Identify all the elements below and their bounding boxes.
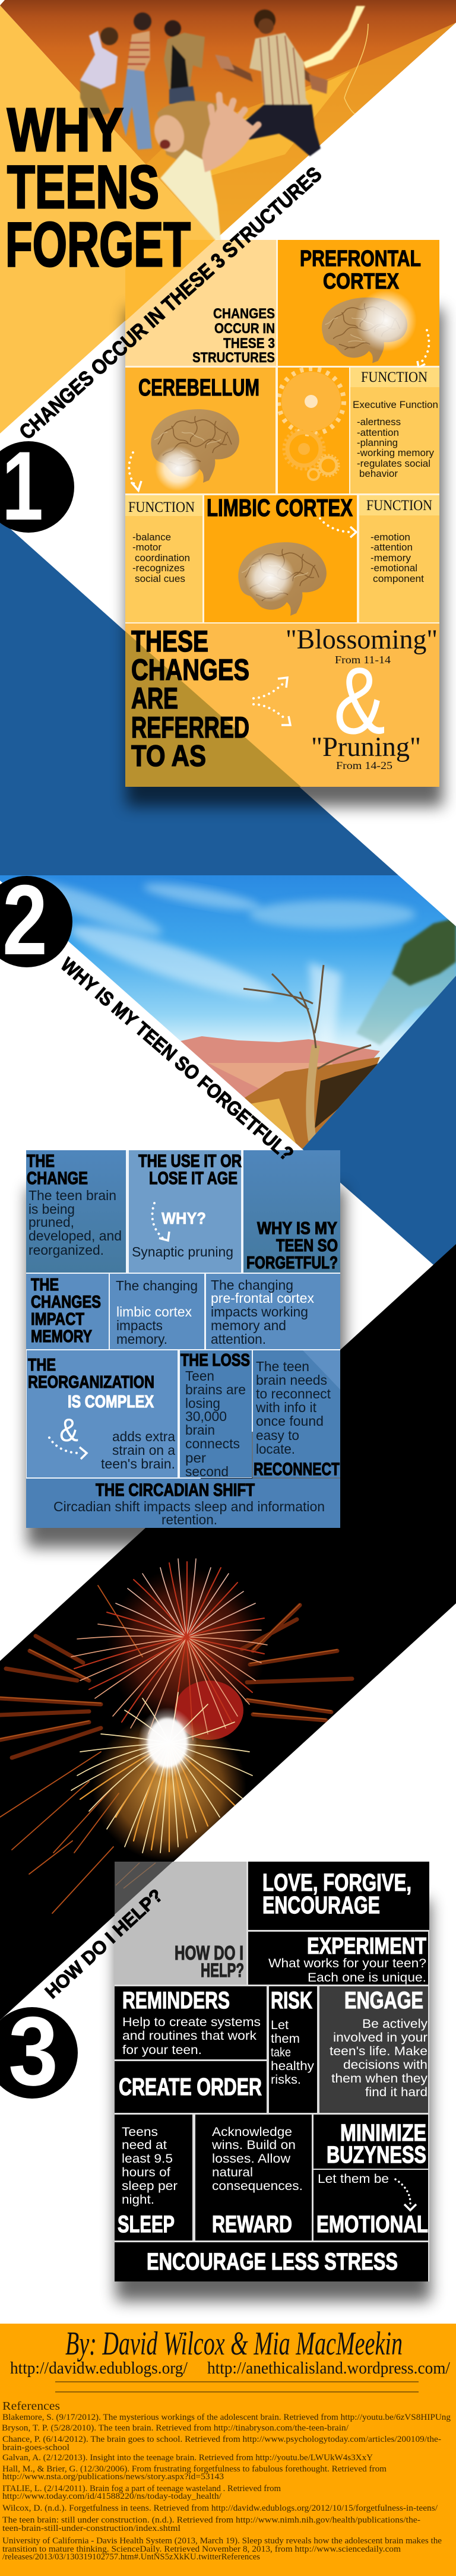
cell: the circadian shift: retention.	[162, 1512, 217, 1527]
person: striped shirt and jeans	[121, 12, 152, 150]
cell: cerebellum function	[125, 495, 202, 622]
cell: changes occur intro: CHANGES	[213, 306, 275, 322]
icon: prefrontal brain	[322, 290, 417, 363]
cell: the circadian shift	[26, 1479, 340, 1528]
icon: gears	[278, 368, 349, 493]
references list: http://www.today.com/id/41588220/ns/today-today_health/	[2, 2492, 222, 2501]
cell: sleep: SLEEP	[118, 2211, 175, 2238]
person: blonde girl reaching forward	[150, 95, 258, 240]
cell: prefrontal function: -working memory	[357, 447, 434, 458]
cell: prefrontal function: -attention	[357, 427, 399, 438]
cell: the circadian shift: Circadian shift impacts sleep and information	[53, 1499, 325, 1514]
cell: limbic function: -attention	[370, 542, 413, 553]
cell: reminders: REMINDERS	[122, 1988, 230, 2014]
icon: cerebellum brain	[151, 409, 239, 491]
cell: the use it or lose it age: Synaptic pruning	[132, 1244, 233, 1259]
cell: engage	[319, 1986, 428, 2113]
cell: reward: REWARD	[212, 2211, 292, 2238]
cell: limbic function: -memory	[370, 552, 411, 564]
cell: the change: CHANGE	[27, 1169, 88, 1188]
cell: the loss	[180, 1350, 252, 1479]
section one panel shadow	[126, 309, 443, 806]
cell: blossoming and pruning: THESE	[131, 625, 208, 658]
arrow: limbic to function	[320, 518, 356, 537]
cell: emotional: Let them be	[318, 2172, 389, 2186]
cell: sleep: night.	[122, 2193, 154, 2207]
cell: prefrontal cortex impacts working memory: attention.	[211, 1331, 266, 1347]
cell: reward: consequences.	[212, 2179, 303, 2193]
cell: the loss: 30,000	[185, 1409, 227, 1424]
arrow: ampersand to strain	[49, 1438, 87, 1459]
cell: the reorganization is complex: teen's brain.	[101, 1456, 175, 1471]
cell: changes occur intro: OCCUR IN	[214, 321, 275, 337]
cell: the change: pruned,	[28, 1214, 74, 1230]
title: Why Teens Forget	[5, 96, 191, 280]
cell: the reorganization is complex	[27, 1350, 178, 1477]
cell: reconnect: brain needs	[256, 1372, 327, 1388]
cell: the reorganization is complex: THE	[28, 1356, 56, 1375]
cell: prefrontal function: Executive Function	[353, 399, 438, 410]
cell: changes occur intro	[125, 240, 276, 366]
cell: limbic cortex impacts memory: The changing	[116, 1278, 198, 1293]
cell: experiment: EXPERIMENT	[307, 1933, 426, 1959]
cell: reward: wins. Build on	[211, 2138, 296, 2152]
cell: blossoming and pruning: REFERRED	[131, 711, 249, 744]
cell: blossoming and pruning: ARE	[131, 682, 178, 715]
diagonal heading: how do I help: HOW DO I HELP?	[41, 1885, 167, 2002]
panel: yellow title triangle	[0, 5, 215, 433]
references list: ITALIE, L. (2/14/2011). Brain fog a part of teenage wasteland . Retrieved from	[2, 2484, 281, 2493]
cell: why is my teen so forgetful: FORGETFUL?	[246, 1254, 338, 1273]
cell: reconnect: to reconnect	[256, 1386, 331, 1401]
title: Why Teens Forget: TEENS	[7, 153, 159, 221]
cell: why is my teen so forgetful	[243, 1150, 340, 1273]
cell: limbic function: component	[373, 573, 424, 584]
cell: engage: find it hard	[365, 2086, 428, 2099]
cell: emotional	[314, 2170, 428, 2240]
references list: /releases/2013/03/130319102757.htm#.UntNS5zXkKU.twitterReferences	[2, 2552, 260, 2562]
cell: the change: developed, and	[28, 1228, 122, 1243]
cell: reconnect: with info it	[255, 1400, 317, 1415]
cell: the changes impact memory: IMPACT	[31, 1310, 84, 1329]
cell: the use it or lose it age: LOSE IT AGE	[149, 1169, 238, 1188]
photo: grand canyon sky and tree	[0, 873, 456, 1154]
cell: engage: teen's life. Make	[330, 2045, 428, 2058]
cell: prefrontal cortex impacts working memory: pre-frontal cortex	[211, 1290, 314, 1306]
cell: sleep: sleep per	[122, 2179, 178, 2193]
cell: limbic function: -emotional	[370, 562, 417, 574]
cell: engage: Be actively	[362, 2017, 428, 2031]
white core glow	[138, 1707, 197, 1778]
cell: cerebellum	[125, 368, 276, 493]
cell: sleep: least 9.5	[122, 2152, 173, 2166]
cell: reward: losses. Allow	[212, 2152, 291, 2166]
cell: reminders: Help to create systems	[122, 2015, 261, 2029]
firework haze	[110, 1572, 262, 1719]
cell: love forgive encourage: LOVE, FORGIVE,	[262, 1869, 411, 1896]
cell: limbic function: -emotion	[370, 531, 410, 543]
cell: blossoming and pruning: "Pruning"	[311, 732, 421, 762]
person: tan jacket	[164, 20, 205, 107]
references list: Hall, M., & Brier, G. (12/30/2006). From frustrating forgetfulness to fabulous forethought. Retrieved from	[2, 2464, 387, 2474]
arrow: prefrontal to function	[417, 330, 429, 368]
cell: engage: ENGAGE	[344, 1988, 423, 2014]
badge: number one: 1	[2, 431, 43, 540]
cell: blossoming and pruning: From 11-14	[335, 654, 391, 666]
cell: the change	[26, 1150, 126, 1273]
cell: limbic cortex	[204, 494, 357, 622]
references list	[2, 2400, 451, 2562]
cell: prefrontal cortex: CORTEX	[323, 269, 399, 293]
red and white burst	[71, 1559, 267, 1740]
cell: prefrontal cortex impacts working memory	[206, 1274, 340, 1349]
cell: prefrontal cortex impacts working memory: impacts working	[211, 1304, 308, 1319]
cell: cerebellum function: -motor	[132, 542, 162, 553]
cell: the loss: per	[185, 1450, 206, 1466]
cell: prefrontal function: FUNCTION	[361, 369, 428, 385]
cell: risk: them	[271, 2032, 300, 2046]
blue band beside section two panel	[302, 976, 456, 1265]
cell: the reorganization is complex: &	[59, 1412, 78, 1448]
cell: prefrontal function: -regulates social	[357, 458, 430, 469]
title: Why Teens Forget: WHY	[7, 96, 124, 164]
cell: sleep: hours of	[122, 2166, 170, 2179]
references list: teen-brain-still-under-construction/index.shtml	[2, 2524, 180, 2533]
cell: blossoming and pruning: TO AS	[131, 739, 206, 773]
cell: reconnect: easy to	[256, 1428, 299, 1443]
cell: risk: Let	[271, 2018, 289, 2032]
cell: cerebellum: CEREBELLUM	[138, 375, 259, 401]
cell: experiment	[248, 1932, 428, 1985]
section two panel shadow	[27, 1188, 344, 1548]
panel: section two forgetfulness	[26, 1150, 340, 1528]
cell: changes occur intro: STRUCTURES	[192, 350, 275, 366]
cell: the loss: connects	[185, 1436, 240, 1451]
photo: group of jumping teens	[0, 0, 456, 243]
diagonal heading: changes occur in these 3 structures: CHANGES OCCUR IN THESE 3 STRUCTURES	[15, 163, 326, 444]
cell: the loss: brain	[185, 1422, 215, 1438]
cell: prefrontal cortex: PREFRONTAL	[300, 246, 421, 271]
author links: http://anethicalisland.wordpress.com/	[207, 2359, 450, 2378]
cell: the use it or lose it age: WHY?	[162, 1209, 206, 1227]
cell: the reorganization is complex: adds extra	[112, 1429, 175, 1444]
cell: the loss: brains are	[185, 1382, 246, 1397]
title: Why Teens Forget: FORGET	[5, 210, 191, 280]
cell: cerebellum function: FUNCTION	[128, 499, 195, 515]
badge: number three: 3	[8, 1996, 58, 2106]
cell: love forgive encourage: ENCOURAGE	[262, 1891, 380, 1919]
cell: changes occur intro: THESE 3	[223, 336, 275, 352]
arrow: why to synaptic pruning	[152, 1203, 169, 1240]
cell: limbic cortex impacts memory: memory.	[116, 1331, 167, 1347]
arrow: cerebellum to function	[129, 452, 141, 490]
cell: risk: risks.	[271, 2073, 301, 2087]
references list: University of California - Davis Health System (2013, March 19). Sleep study reveals how the adolescent brain makes the	[2, 2536, 442, 2546]
panel: section one brain structures	[125, 240, 439, 787]
cell: engage: decisions with	[343, 2058, 428, 2072]
references list: transition to mature thinking. ScienceDaily. Retrieved November 8, 2013, from http://www.sciencedaily.com	[2, 2545, 401, 2554]
section three panel shadow	[116, 1900, 430, 2301]
cell: emotional: EMOTIONAL	[316, 2211, 428, 2238]
cell: cerebellum function: -balance	[132, 531, 171, 543]
person: man jumping in striped shirt	[215, 10, 328, 156]
cell: risk: RISK	[271, 1988, 312, 2014]
author links: http://davidw.edublogs.org/	[10, 2359, 188, 2378]
arrow: forked dotted arrow	[254, 678, 290, 725]
cell: minimize buzyness: BUZYNESS	[327, 2142, 426, 2168]
panel: section three how do I help	[115, 1862, 429, 2281]
cell: engage: involved in your	[333, 2031, 428, 2045]
cell: minimize buzyness	[314, 2115, 428, 2169]
blue band behind section one panel	[0, 520, 398, 875]
cell: reward	[195, 2115, 312, 2240]
cell: love forgive encourage	[248, 1862, 429, 1930]
cell: create order	[115, 2061, 267, 2113]
cell: the changes impact memory: MEMORY	[31, 1327, 92, 1346]
cell: sleep: need at	[122, 2138, 167, 2152]
cell: minimize buzyness: MINIMIZE	[340, 2120, 426, 2146]
references list: The teen brain: still under construction. (n.d.). Retrieved from http://www.nimh.nih.gov/health/publications/the-	[2, 2515, 420, 2525]
cell: prefrontal cortex impacts working memory: The changing	[211, 1277, 293, 1293]
cell: the reorganization is complex: strain on a	[112, 1442, 175, 1458]
cell: risk: take	[271, 2046, 291, 2059]
arrow: let them be to emotional	[395, 2179, 416, 2210]
cell: limbic cortex impacts memory: limbic cortex	[116, 1304, 192, 1319]
cell: the changes impact memory: CHANGES	[31, 1293, 101, 1312]
cell: reconnect: locate.	[256, 1441, 295, 1457]
references list: Bryson, T. P. (5/28/2010). The teen brain. Retrieved from http://tinabryson.com/the-teen-brain/	[2, 2423, 349, 2433]
references list: Wilcox, D. (n.d.). Forgetfulness in teens. Retrieved from http://davidw.edublogs.org/2012/10/15/forgetfulness-in-teens/	[2, 2504, 438, 2513]
firework streak feathers	[0, 1586, 352, 1913]
cell: cerebellum function: social cues	[135, 573, 185, 584]
cell: the change: The teen brain	[28, 1188, 116, 1203]
references list: brain-goes-school	[2, 2443, 69, 2452]
cell: blossoming and pruning	[125, 624, 439, 787]
cell: limbic function: FUNCTION	[366, 498, 432, 514]
cell: encourage less stress	[115, 2242, 428, 2281]
cell: sleep	[115, 2115, 192, 2240]
cell: how do I help: HOW DO I	[175, 1942, 243, 1964]
cell: the use it or lose it age	[129, 1150, 242, 1273]
photo: fireworks	[0, 1241, 456, 2025]
cell: how do I help	[115, 1862, 246, 1985]
cell: reward: Acknowledge	[212, 2125, 292, 2139]
cell: limbic cortex: LIMBIC CORTEX	[207, 494, 353, 521]
badge: number two: 2	[2, 864, 48, 976]
cell: the changes impact memory: THE	[31, 1276, 59, 1295]
cell: prefrontal function: -planning	[357, 437, 398, 448]
cell: cerebellum function: coordination	[135, 552, 190, 564]
person: lilac shirt	[80, 27, 118, 119]
cell: risk	[269, 1986, 317, 2113]
cell: prefrontal function: -alertness	[357, 416, 401, 428]
cell: why is my teen so forgetful: TEEN SO	[276, 1236, 338, 1255]
cell: reminders	[115, 1986, 267, 2059]
cell: prefrontal function: behavior	[359, 468, 398, 479]
cell: reconnect: once found	[256, 1413, 324, 1429]
cell: the change: is being	[28, 1201, 75, 1217]
cell: the change: reorganized.	[28, 1242, 104, 1258]
cell: reminders: for your teen.	[122, 2043, 202, 2057]
cell: reconnect: The teen	[256, 1359, 309, 1374]
references list: http://www.nsta.org/publications/news/story.aspx?id=53143	[2, 2472, 224, 2482]
references list: References	[2, 2400, 60, 2413]
cell: the loss: losing	[185, 1395, 220, 1411]
golden burst fan	[92, 1713, 246, 1862]
cell: the loss: second	[185, 1464, 229, 1479]
cell: sleep: Teens	[122, 2125, 158, 2139]
cell: experiment: What works for your teen?	[268, 1957, 426, 1970]
cell: reconnect	[201, 1350, 340, 1479]
cell: blossoming and pruning: &	[334, 647, 385, 754]
cell: the use it or lose it age: THE USE IT OR	[138, 1151, 242, 1171]
cell: prefrontal cortex impacts working memory: memory and	[211, 1318, 286, 1333]
cell: blossoming and pruning: "Blossoming"	[286, 624, 438, 655]
cell: limbic cortex impacts memory	[110, 1274, 204, 1349]
cell: engage: them when they	[331, 2072, 428, 2086]
cell: blossoming and pruning: From 14-25	[336, 759, 392, 771]
cell: prefrontal cortex	[278, 240, 439, 368]
cell: the changes impact memory	[26, 1274, 109, 1349]
cell: cerebellum function: -recognizes	[132, 562, 185, 574]
cell: limbic function	[359, 495, 439, 622]
cell: the circadian shift: THE CIRCADIAN SHIFT	[96, 1480, 255, 1500]
cell: the reorganization is complex: IS COMPLEX	[68, 1393, 154, 1412]
cell: the change: THE	[27, 1151, 55, 1171]
cell: blossoming and pruning: CHANGES	[131, 653, 249, 686]
cell: reward: natural	[212, 2166, 253, 2179]
cell: create order: CREATE ORDER	[119, 2073, 262, 2100]
cell: reminders: and routines that work	[122, 2029, 257, 2043]
cell: how do I help: HELP?	[201, 1960, 244, 1981]
cell: risk: healthy	[271, 2059, 315, 2073]
cell: why is my teen so forgetful: WHY IS MY	[257, 1219, 337, 1238]
diagonal heading: why is my teen so forgetful: WHY IS MY TEEN SO FORGETFUL?	[56, 953, 298, 1165]
panel: footer credits and references	[0, 2324, 456, 2576]
cell: the reorganization is complex: REORGANIZATION	[28, 1373, 154, 1392]
cell: reconnect: RECONNECT	[254, 1460, 340, 1479]
cell: prefrontal function	[350, 368, 439, 493]
cell: the loss: Teen	[185, 1368, 214, 1384]
author links	[10, 2359, 450, 2378]
icon: limbic brain	[238, 542, 327, 616]
cell: the loss: THE LOSS	[180, 1351, 250, 1370]
red firework core	[175, 1681, 243, 1740]
references list: Chance, P. (6/14/2012). The brain goes to school. Retrieved from http://www.psychologytoday.com/articles/200109/the-	[2, 2435, 441, 2444]
references list: Galvan, A. (2/12/2013). Insight into the teenage brain. Retrieved from http://youtu.be/LWUkW4s3XxY	[2, 2453, 373, 2463]
cell: limbic cortex impacts memory: impacts	[116, 1318, 163, 1333]
cell: experiment: Each one is unique.	[308, 1971, 426, 1985]
references list: Blakemore, S. (9/17/2012). The mysterious workings of the adolescent brain. Retrieved from http://youtu.be/6zVS8HIPUng	[2, 2413, 451, 2422]
